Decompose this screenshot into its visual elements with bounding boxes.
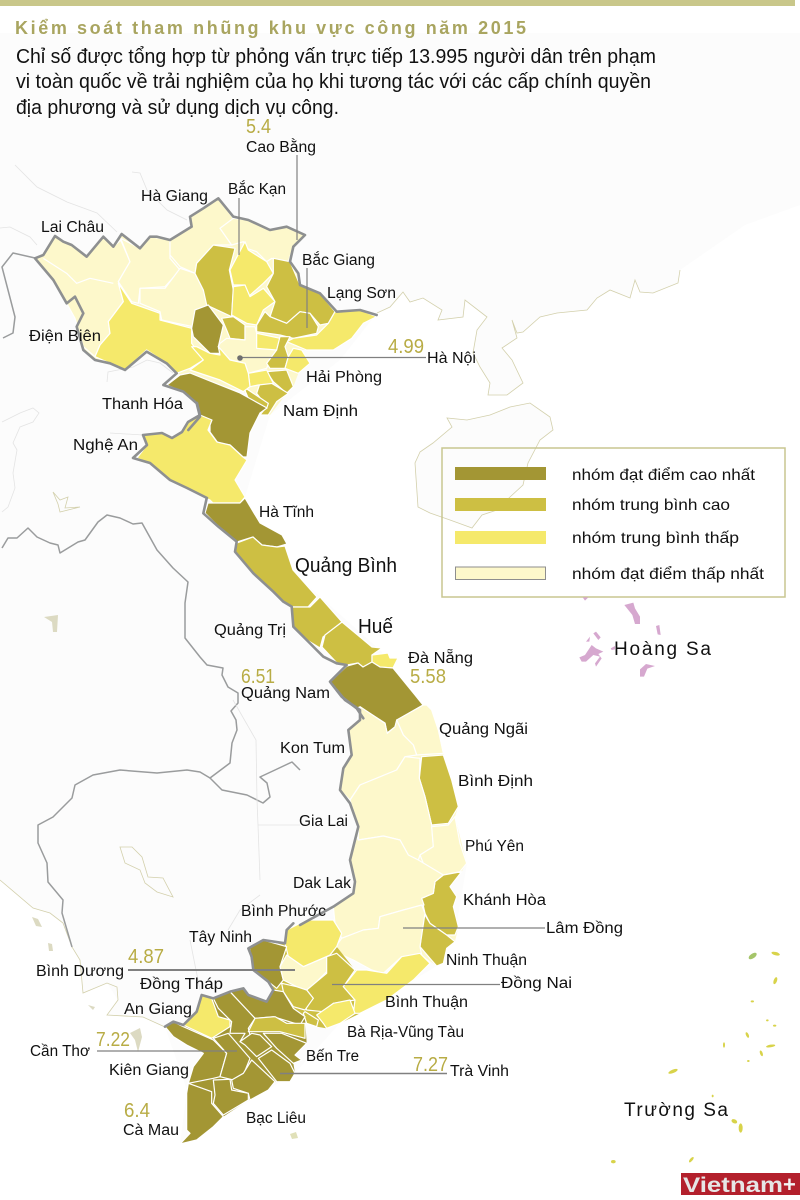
map: north-central provinces (137, 373, 423, 733)
province labels: Gia Lai (299, 813, 348, 830)
province labels: Phú Yên (465, 838, 524, 855)
province labels: Hà Nội (427, 350, 476, 367)
legend: nhóm trung bình thấp (572, 530, 739, 547)
province labels: Đồng Nai (501, 975, 572, 992)
score values: 4.99 (388, 336, 424, 358)
marker: Hà Nội (237, 355, 243, 361)
province labels: Đà Nẵng (408, 650, 473, 667)
Vietnam gray border (35, 198, 377, 1027)
islands: Hoàng Sa (579, 597, 661, 677)
province labels (29, 139, 623, 1139)
score values: 7.22 (96, 1029, 130, 1051)
province labels: Lai Châu (41, 219, 104, 236)
leader lines (97, 155, 545, 1074)
province labels: Nghệ An (73, 437, 138, 454)
province labels: Thanh Hóa (102, 396, 183, 413)
score values: 4.87 (128, 946, 164, 968)
province labels: Bình Định (458, 773, 533, 790)
province labels: Bắc Kạn (228, 181, 286, 198)
logo: Vietnam+ (681, 1172, 800, 1197)
province labels: Quảng Nam (241, 685, 330, 702)
province labels: Cà Mau (123, 1122, 179, 1139)
province labels: Điện Biên (29, 328, 101, 345)
province labels: Hà Giang (141, 188, 208, 205)
province labels: Hải Phòng (306, 369, 382, 386)
province labels: Lâm Đồng (546, 920, 623, 937)
map: southern provinces (165, 920, 430, 1144)
province labels: Ninh Thuận (446, 952, 527, 969)
province labels: Huế (358, 616, 393, 638)
legend: nhóm đạt điểm thấp nhất (572, 565, 765, 583)
province labels: Bà Rịa-Vũng Tàu (347, 1024, 464, 1041)
province labels: Dak Lak (293, 875, 351, 892)
province labels: Bạc Liêu (246, 1110, 306, 1127)
intro text (16, 46, 656, 119)
province labels: Bình Phước (241, 903, 326, 920)
intro text: địa phương và sử dụng dịch vụ công. (16, 97, 339, 119)
province labels: Tây Ninh (189, 929, 252, 946)
province labels: Hà Tĩnh (259, 504, 314, 521)
province labels: Đồng Tháp (140, 976, 223, 993)
score values: 7.27 (413, 1054, 448, 1076)
province labels: Cần Thơ (30, 1043, 90, 1060)
top bar (0, 0, 795, 6)
legend (442, 448, 785, 597)
title: Kiểm soát tham nhũng khu vực công năm 2015 (15, 18, 526, 38)
province labels: Trà Vinh (450, 1063, 509, 1080)
province labels: An Giang (124, 1001, 192, 1018)
logo: Vietnam+: + (783, 1172, 796, 1197)
label: Hoàng Sa: Hoàng Sa (614, 639, 711, 660)
intro text: vi toàn quốc về trải nghiệm của họ khi tương tác với các cấp chính quyền (16, 71, 651, 93)
province labels: Khánh Hòa (463, 892, 546, 909)
intro text: Chỉ số được tổng hợp từ phỏng vấn trực tiếp 13.995 người dân trên phạm (16, 46, 656, 68)
province labels: Quảng Bình (295, 555, 397, 577)
province labels: Bắc Giang (302, 252, 375, 269)
province labels: Lạng Sơn (327, 285, 396, 302)
province labels: Nam Định (283, 403, 358, 420)
country borders: Laos, Thailand, Cambodia (0, 165, 300, 990)
province labels: Kiên Giang (109, 1062, 189, 1079)
province labels: Bình Thuận (385, 994, 468, 1011)
score values: 6.4 (124, 1100, 150, 1122)
province labels: Bến Tre (306, 1048, 359, 1065)
logo: Vietnam+: Vietnam (683, 1174, 783, 1197)
map: central highlands and coast provinces (333, 705, 467, 973)
map: northern provinces (35, 198, 377, 415)
score values: 5.4 (246, 116, 271, 138)
province labels: Bình Dương (36, 963, 124, 980)
legend: nhóm đạt điểm cao nhất (572, 466, 756, 484)
province labels: Kon Tum (280, 740, 345, 757)
score values (96, 116, 448, 1122)
province labels: Quảng Trị (214, 622, 286, 639)
islands in the Gulf of Thailand (32, 615, 298, 1139)
islands: Trường Sa (611, 951, 780, 1163)
label: Trường Sa: Trường Sa (624, 1100, 728, 1121)
province labels: Cao Bằng (246, 139, 316, 156)
legend: nhóm trung bình cao (572, 497, 730, 514)
score values: 6.51 (241, 666, 275, 688)
score values: 5.58 (410, 666, 446, 688)
province labels: Quảng Ngãi (439, 721, 528, 738)
